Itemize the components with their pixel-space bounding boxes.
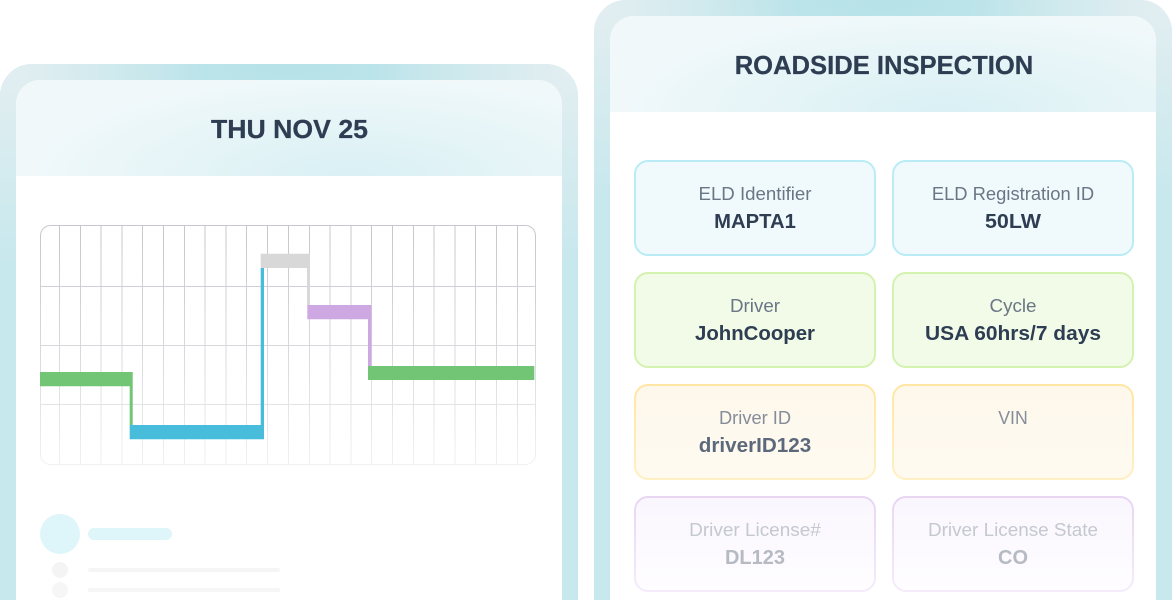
panel: roadside inspection xyxy=(594,0,1172,600)
card: Cycle: Cycle xyxy=(990,296,1036,316)
card: Driver License#: Driver License# xyxy=(689,520,821,540)
chart: hours of service log xyxy=(40,225,536,465)
header band: roadside inspection xyxy=(610,16,1156,112)
panel frame: daily log xyxy=(0,64,578,600)
card: ELD Identifier: ELD Identifier xyxy=(698,184,812,204)
header band: daily log xyxy=(16,80,562,176)
log segment: blue xyxy=(130,268,264,439)
card: Driver License State xyxy=(893,497,1133,591)
card: VIN: VIN xyxy=(998,408,1028,428)
card: ELD Registration ID: 50LW xyxy=(985,211,1041,233)
card: Driver License State: CO xyxy=(998,547,1028,569)
log segment: gray xyxy=(261,254,310,305)
card: VIN xyxy=(893,385,1133,479)
heading: roadside inspection: ROADSIDE INSPECTION xyxy=(735,50,1033,80)
panel: daily log xyxy=(0,64,578,600)
log segment: purple xyxy=(307,305,372,366)
skeleton list placeholder xyxy=(40,514,280,598)
card: Cycle xyxy=(893,273,1133,367)
panel frame: roadside inspection xyxy=(594,0,1172,600)
card: ELD Registration ID xyxy=(893,161,1133,255)
heading: date: THU NOV 25 xyxy=(211,114,368,144)
chart grid xyxy=(40,225,536,465)
log segment: green, last xyxy=(368,366,534,380)
card: Driver: JohnCooper xyxy=(695,323,815,345)
card: Driver ID: Driver ID xyxy=(719,408,791,428)
log segment: green, first xyxy=(40,372,133,425)
card: Driver ID: driverID123 xyxy=(699,435,811,457)
card: Driver xyxy=(635,273,875,367)
card: ELD Registration ID: ELD Registration ID xyxy=(932,184,1094,204)
card: Driver License State: Driver License State xyxy=(928,520,1098,540)
card: Driver License#: DL123 xyxy=(725,547,785,569)
card: Cycle: USA 60hrs/7 days xyxy=(925,323,1101,345)
card: Driver License# xyxy=(635,497,875,591)
card: Driver ID xyxy=(635,385,875,479)
card: Driver: Driver xyxy=(730,296,780,316)
card: ELD Identifier: MAPTA1 xyxy=(714,211,796,233)
card: ELD Identifier xyxy=(635,161,875,255)
